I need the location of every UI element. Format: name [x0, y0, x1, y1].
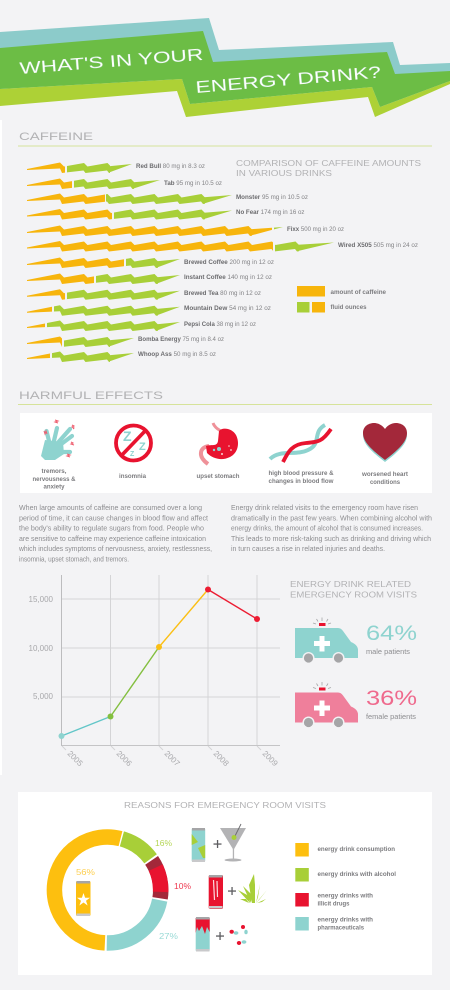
- heading: emergency room visits: [290, 579, 417, 600]
- stat: male patients: male patients: [366, 647, 410, 656]
- legend: reasons: energy drinks with alcohol: [318, 871, 396, 878]
- icon: can plus pills: [196, 917, 248, 952]
- legend: reasons: energy drinks with: [318, 892, 373, 900]
- label: blood pressure: high blood pressure &: [268, 470, 334, 477]
- data points: [58, 586, 260, 739]
- row: Wired X505: Wired X505 505 mg in 24 oz: [338, 242, 418, 249]
- donut percentages: 16%: [155, 838, 172, 848]
- text block: emergency room visits: This leads to more risk-taking such as drinking and driving which: [231, 534, 431, 543]
- icon: insomnia: Z: [130, 451, 135, 458]
- axis labels: 2008: [212, 749, 231, 768]
- row: Brewed Coffee: [27, 258, 322, 268]
- row: Fixx: [27, 226, 344, 236]
- icon: insomnia: [116, 426, 151, 480]
- row: Fixx: Fixx 500 mg in 20 oz: [287, 226, 344, 233]
- row: Brewed Tea: [27, 289, 322, 300]
- text block: caffeine effects: [18, 503, 212, 564]
- text block: caffeine effects: which includes symptoms of nervousness, anxiety, restlessness,: [18, 544, 212, 553]
- title line 2: ENERGY DRINK?: [195, 62, 382, 97]
- label: heart: [361, 471, 409, 486]
- legend: reasons: pharmaceuticals: [318, 924, 364, 932]
- donut percentages: 27%: [159, 931, 178, 941]
- row: Monster: Monster 95 mg in 10.5 oz: [236, 194, 308, 201]
- row: Mountain Dew: [27, 305, 322, 316]
- legend: caffeine chart: fluid ounces: [330, 304, 367, 311]
- stat: male patients: 64%: [366, 622, 417, 645]
- row: Brewed Tea: Brewed Tea 80 mg in 12 oz: [184, 290, 261, 297]
- legend: reasons: illicit drugs: [318, 900, 350, 908]
- icon: teal ambulance: [295, 618, 358, 663]
- donut percentages: [76, 838, 191, 941]
- label: heart: worsened heart: [361, 471, 409, 478]
- text block: caffeine effects: When large amounts of caffeine are consumed over a long: [19, 503, 202, 512]
- title banner: [0, 18, 450, 117]
- icon: heart: [361, 423, 409, 486]
- axis labels: 2007: [163, 749, 182, 768]
- title line 1: WHAT'S IN YOUR: [19, 45, 204, 78]
- axis labels: 15,000: [29, 595, 54, 604]
- heading: caffeine: CAFFEINE: [19, 131, 93, 143]
- axis labels: 2009: [261, 749, 280, 768]
- row: Whoop Ass: Whoop Ass 50 mg in 8.5 oz: [138, 351, 216, 358]
- text block: emergency room visits: in turn causes a rise in related injuries and deaths.: [231, 544, 385, 553]
- row: No Fear: [27, 209, 322, 220]
- axis labels: 5,000: [33, 692, 54, 701]
- row: Bomba Energy: [27, 336, 322, 347]
- legend: caffeine chart: [297, 286, 386, 312]
- row: Instant Coffee: [27, 274, 322, 284]
- panel: reasons for emergency room visits: [18, 792, 432, 975]
- bolt chart: caffeine in drinks: [27, 162, 418, 362]
- icon: pink ambulance: [295, 682, 358, 728]
- row: Tab: [27, 178, 322, 189]
- row: Instant Coffee: Instant Coffee 140 mg in 12 oz: [184, 274, 272, 281]
- label: tremors: tremors,: [42, 468, 67, 475]
- heading: harmful effects: HARMFUL EFFECTS: [19, 390, 163, 402]
- row: Pepsi Cola: Pepsi Cola 38 mg in 12 oz: [184, 321, 256, 328]
- text block: caffeine effects: period of time, it can cause changes in blood flow and affect: [19, 514, 208, 522]
- axis labels: 10,000: [29, 644, 54, 653]
- icon: insomnia: Z: [139, 441, 146, 453]
- legend: reasons: energy drink consumption: [318, 846, 395, 853]
- row: Whoop Ass: [27, 351, 322, 362]
- row: Brewed Coffee: Brewed Coffee 200 mg in 12 oz: [184, 259, 274, 266]
- icon: can plus cannabis leaf: [209, 874, 267, 909]
- row: Red Bull: Red Bull 80 mg in 8.3 oz: [136, 163, 205, 170]
- text block: caffeine effects: the body's ability to regulate sugars from food. People who: [19, 524, 204, 533]
- row: Pepsi Cola: [27, 320, 322, 331]
- row: Bomba Energy: Bomba Energy 75 mg in 8.4 oz: [138, 336, 224, 343]
- caffeine comparison heading: [236, 158, 421, 178]
- label: blood pressure: changes in blood flow: [268, 478, 334, 485]
- heading: emergency room visits: ENERGY DRINK RELATED: [290, 579, 411, 589]
- line chart: emergency room visits by year: [29, 575, 280, 768]
- text block: caffeine effects: are sensitive to caffeine may experience caffeine intoxication: [19, 534, 206, 543]
- icon: insomnia: Z: [123, 428, 132, 444]
- donut percentages: 56%: [76, 867, 95, 877]
- row: Wired X505: [27, 241, 418, 252]
- panel: harmful effects icons: [20, 413, 432, 493]
- axis labels: 2006: [115, 749, 134, 768]
- row: No Fear: No Fear 174 mg in 16 oz: [236, 209, 304, 216]
- label: tremors: [32, 468, 76, 490]
- icon: insomnia: insomnia: [119, 473, 146, 480]
- icon: energy drink can with star: [76, 881, 90, 916]
- legend: reasons: energy drinks with: [318, 916, 373, 924]
- label: tremors: nervousness &: [32, 476, 76, 483]
- row: Monster: [27, 194, 322, 204]
- donut percentages: 10%: [174, 881, 191, 891]
- label: heart: conditions: [370, 479, 400, 486]
- stat: male patients: [295, 618, 417, 663]
- caffeine comparison heading: COMPARISON OF CAFFEINE AMOUNTS: [236, 158, 421, 168]
- text block: emergency room visits: dramatically in the past few years. When combining alcohol with: [231, 514, 432, 522]
- icon: blood vessels: [268, 425, 334, 485]
- stat: female patients: [295, 682, 417, 728]
- row: Red Bull: [27, 162, 322, 173]
- row: Mountain Dew: Mountain Dew 54 mg in 12 oz: [184, 305, 271, 312]
- heading: emergency room visits: EMERGENCY ROOM VISITS: [290, 590, 417, 600]
- text block: emergency room visits: [231, 503, 432, 553]
- icon: upset stomach: upset stomach: [196, 473, 240, 480]
- text block: caffeine effects: insomnia, upset stomach, and tremors.: [19, 554, 129, 564]
- legend: reasons: [295, 843, 396, 932]
- axis labels: 2005: [66, 749, 85, 768]
- row: Tab: Tab 95 mg in 10.5 oz: [164, 180, 222, 187]
- data line: [62, 590, 257, 736]
- legend: caffeine chart: amount of caffeine: [330, 289, 386, 296]
- donut chart: [54, 837, 161, 943]
- icon: can plus martini: [192, 824, 246, 862]
- label: tremors: anxiety: [44, 484, 65, 490]
- text block: emergency room visits: Energy drink related visits to the emergency room have risen: [231, 503, 418, 512]
- icon: shaking hand: [32, 420, 76, 490]
- caffeine comparison heading: IN VARIOUS DRINKS: [236, 168, 332, 178]
- label: blood pressure: [268, 470, 334, 485]
- axis labels: [29, 595, 280, 768]
- text block: emergency room visits: energy drinks, the amount of alcohol that is consumed increases.: [231, 524, 423, 533]
- panel heading: REASONS FOR EMERGENCY ROOM VISITS: [124, 801, 326, 810]
- stat: female patients: 36%: [366, 687, 417, 710]
- stat: female patients: female patients: [366, 712, 416, 721]
- icon: upset stomach: [196, 423, 240, 480]
